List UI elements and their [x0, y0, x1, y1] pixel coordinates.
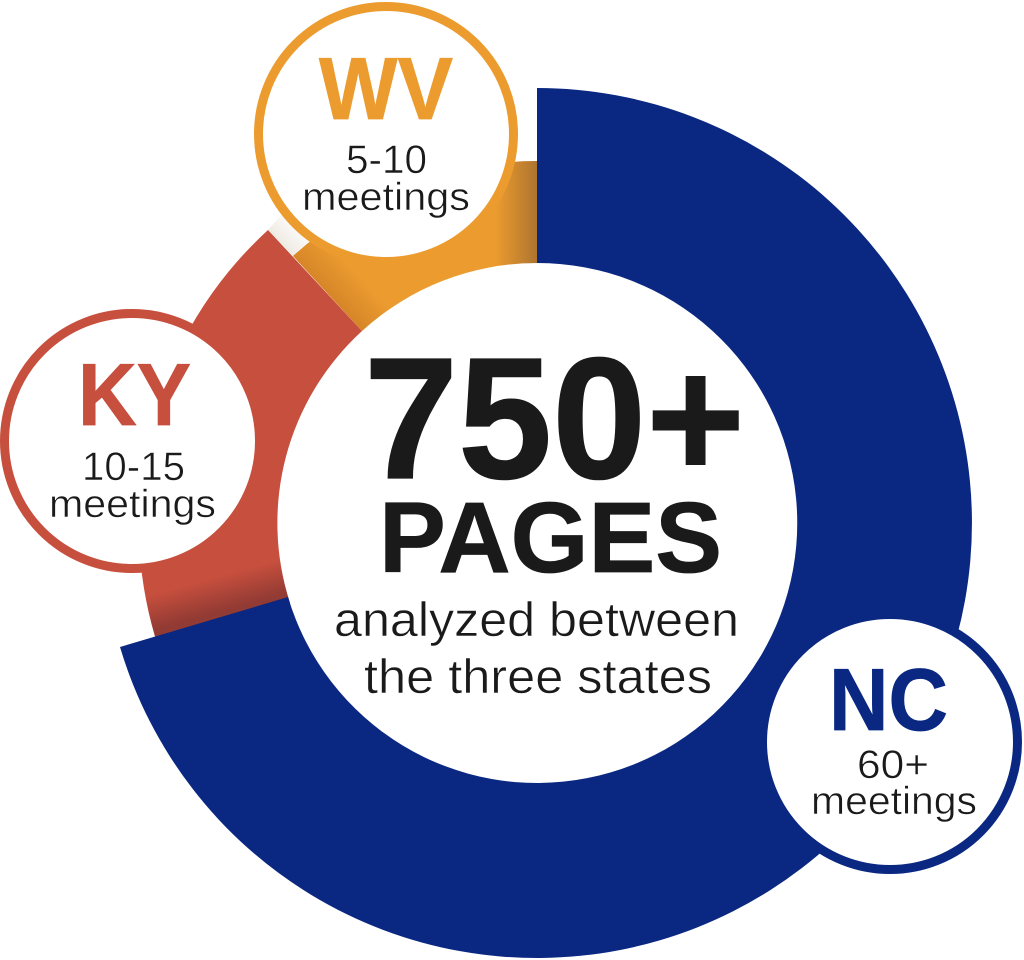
NC meetings count: 60+ — [857, 743, 929, 787]
callout: KY — [4, 314, 260, 568]
NC heading: NC — [829, 650, 948, 749]
donut segment: WV — [268, 155, 537, 340]
KY meetings label: meetings — [49, 483, 216, 526]
description line 2: the three states — [364, 651, 712, 704]
description line 1: analyzed between — [334, 594, 739, 647]
donut segment: NC — [120, 88, 972, 958]
KY meetings count: 10-15 — [82, 445, 185, 489]
donut segment: KY — [130, 230, 362, 650]
big number: 750+ — [364, 321, 745, 515]
centre text block — [334, 321, 745, 704]
NC meetings label: meetings — [811, 780, 977, 823]
callout: WV — [258, 6, 514, 262]
pages heading: PAGES — [379, 482, 722, 594]
WV heading: WV — [319, 39, 453, 138]
callout: NC — [762, 614, 1018, 870]
WV meetings label: meetings — [302, 176, 470, 219]
WV meetings count: 5-10 — [346, 138, 427, 182]
KY heading: KY — [78, 345, 191, 444]
